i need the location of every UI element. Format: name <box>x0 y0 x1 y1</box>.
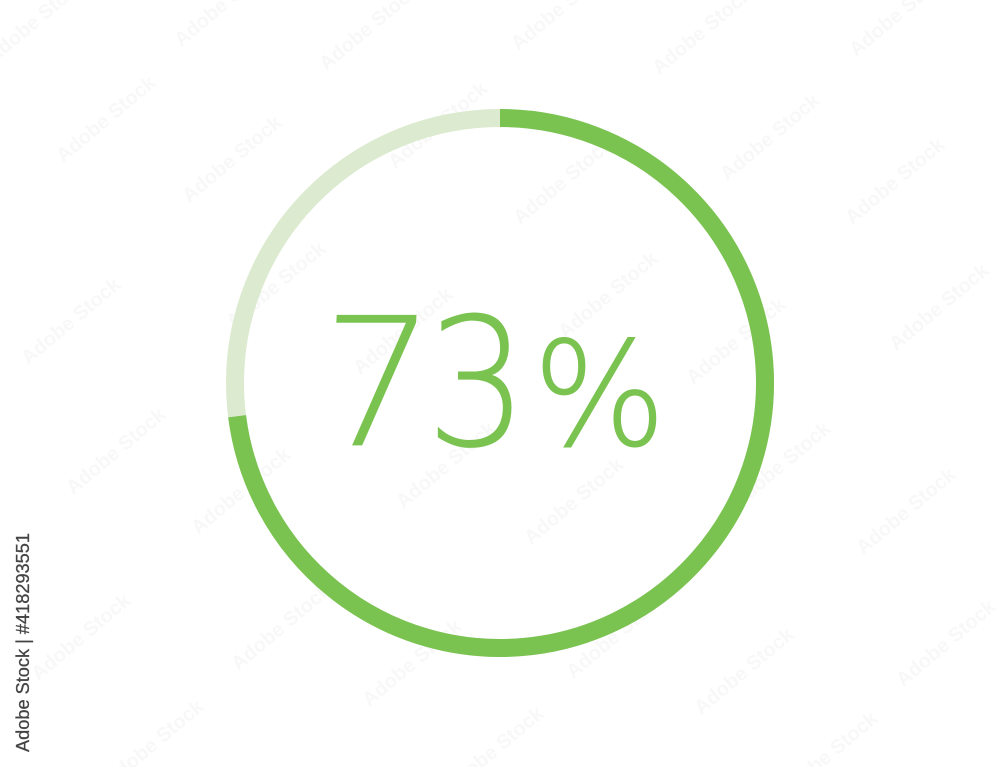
watermark pattern: Adobe Stock <box>892 595 1000 691</box>
watermark pattern: Adobe Stock <box>392 417 501 513</box>
progress ring <box>235 118 765 648</box>
watermark pattern: Adobe Stock <box>520 453 629 549</box>
watermark pattern: Adobe Stock <box>17 273 126 369</box>
watermark pattern: Adobe Stock <box>690 623 799 719</box>
watermark pattern: Adobe Stock <box>682 293 791 389</box>
percentage value: % <box>533 310 666 480</box>
watermark pattern: Adobe Stock <box>885 259 994 355</box>
watermark pattern: Adobe Stock <box>62 403 171 499</box>
watermark pattern: Adobe Stock <box>384 77 493 173</box>
watermark pattern: Adobe Stock <box>727 417 836 513</box>
stock id caption: Adobe Stock | #418293551 <box>13 533 33 752</box>
watermark pattern: Adobe Stock <box>562 587 671 683</box>
ring progress arc: 73% <box>237 118 765 648</box>
watermark pattern: Adobe Stock <box>227 579 336 675</box>
percentage value: 3 <box>426 280 528 487</box>
watermark pattern: Adobe Stock <box>349 283 458 379</box>
watermark pattern: Adobe Stock <box>27 589 136 685</box>
percentage value <box>313 280 666 488</box>
ring track <box>235 118 765 648</box>
watermark pattern: Adobe Stock <box>358 615 467 711</box>
watermark pattern: Adobe Stock <box>554 247 663 343</box>
watermark pattern: Adobe Stock <box>222 237 331 333</box>
watermark pattern: Adobe Stock <box>841 133 950 229</box>
watermark pattern: Adobe Stock <box>187 443 296 539</box>
watermark pattern: Adobe Stock <box>52 71 161 167</box>
watermark pattern: Adobe Stock <box>509 133 618 229</box>
watermark pattern: Adobe Stock <box>852 463 961 559</box>
percentage value: 7 <box>313 281 438 488</box>
watermark pattern: Adobe Stock <box>716 89 825 185</box>
watermark pattern: Adobe Stock <box>178 111 287 207</box>
